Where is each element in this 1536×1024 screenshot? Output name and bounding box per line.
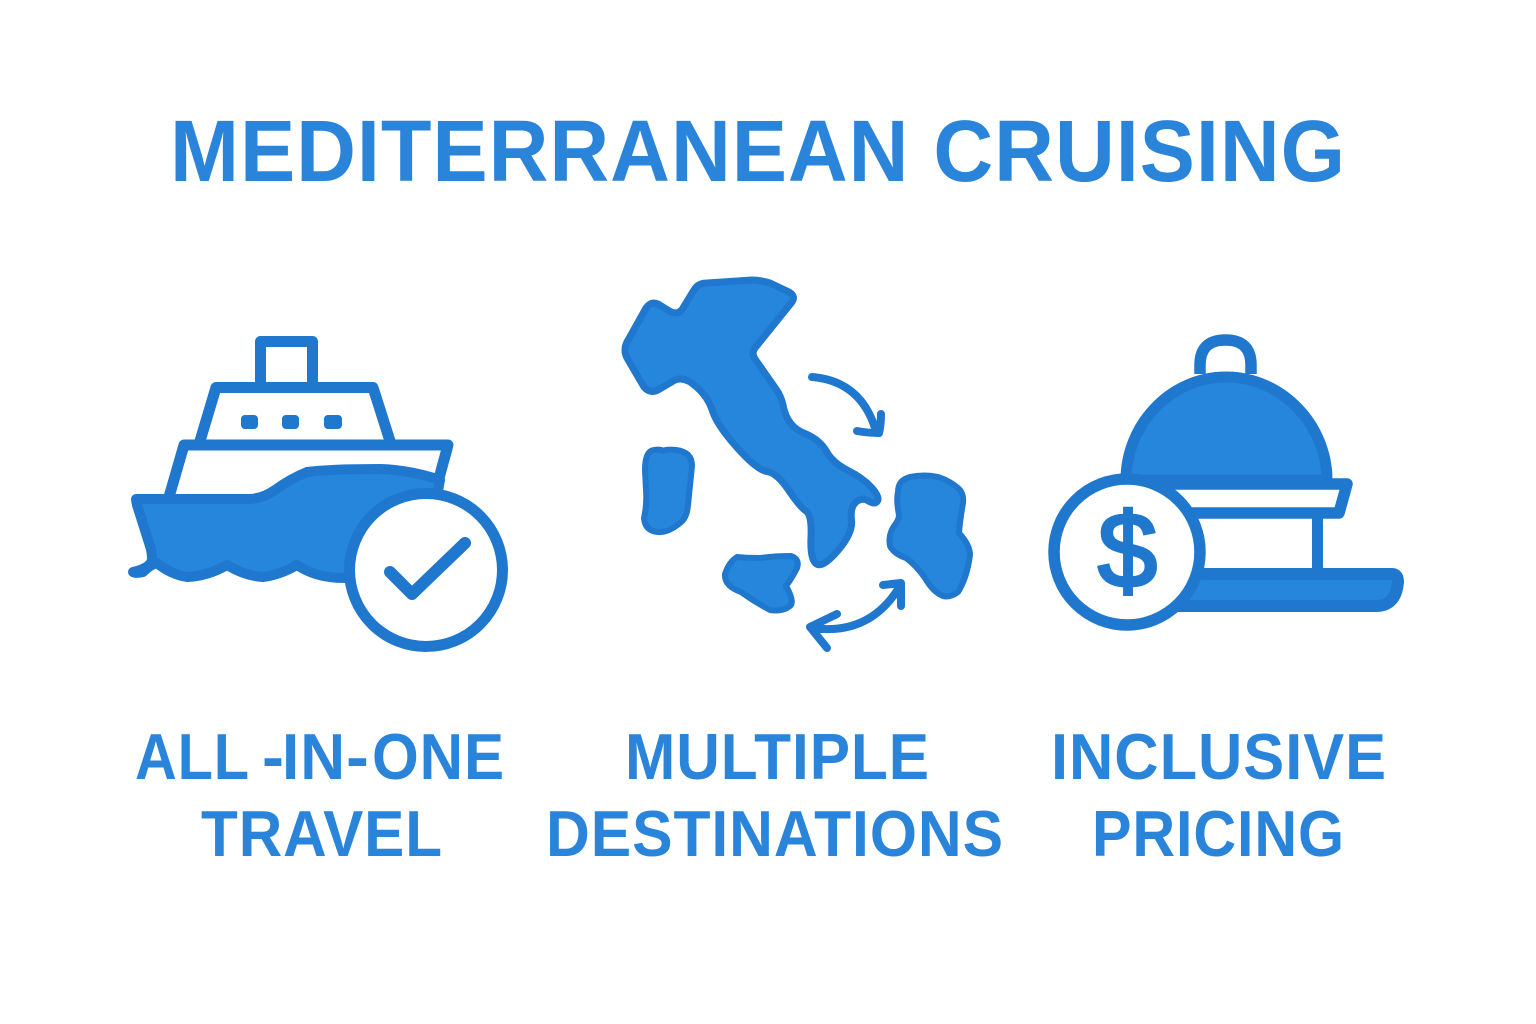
ship lower deck: [169, 445, 448, 497]
ship upper deck: [200, 388, 390, 441]
label: inclusive pricing: INCLUSIVE: [1051, 720, 1387, 793]
check mark: [390, 543, 465, 594]
cloche dome: [1126, 377, 1327, 480]
label: all-in-one travel: -: [262, 720, 285, 793]
label: multiple destinations: MULTIPLE: [625, 720, 930, 793]
label: all-in-one travel: -: [346, 720, 370, 793]
arrow: two-way route: [810, 583, 901, 648]
label: inclusive pricing: PRICING: [1092, 797, 1345, 870]
cloche post: [1312, 518, 1323, 568]
cloche brim: [1165, 484, 1347, 513]
check badge circle: [350, 494, 502, 646]
panel: all-in-one travel: [133, 342, 505, 870]
label: multiple destinations: DESTINATIONS: [546, 797, 1004, 870]
ship funnel: [260, 342, 312, 382]
label: all-in-one travel: ONE: [372, 720, 505, 793]
icon: map of Italy and islands with route arrows: [625, 280, 970, 648]
icon: dining cloche with dollar coin: [1054, 340, 1398, 625]
title: MEDITERRANEAN CRUISING: [170, 103, 1346, 200]
serving tray: [1170, 574, 1398, 606]
cloche handle: [1200, 340, 1251, 374]
ship hull on waves: [133, 469, 440, 590]
label: all-in-one travel: IN: [282, 720, 346, 793]
coin: [1054, 479, 1200, 625]
panel: multiple destinations: [546, 280, 1004, 870]
arrow: route to Greece: [812, 377, 881, 433]
dollar sign: $: [1098, 492, 1157, 610]
map: Greece: [890, 476, 970, 596]
map: Sicily: [725, 556, 798, 610]
label: all-in-one travel: TRAVEL: [201, 797, 443, 870]
map: Sardinia: [644, 450, 692, 532]
panel: inclusive pricing: [1051, 340, 1398, 870]
icon: cruise ship with check mark: [133, 342, 502, 646]
label: all-in-one travel: ALL: [135, 720, 250, 793]
map: Italy mainland: [625, 280, 878, 565]
ship windows: [241, 415, 342, 429]
